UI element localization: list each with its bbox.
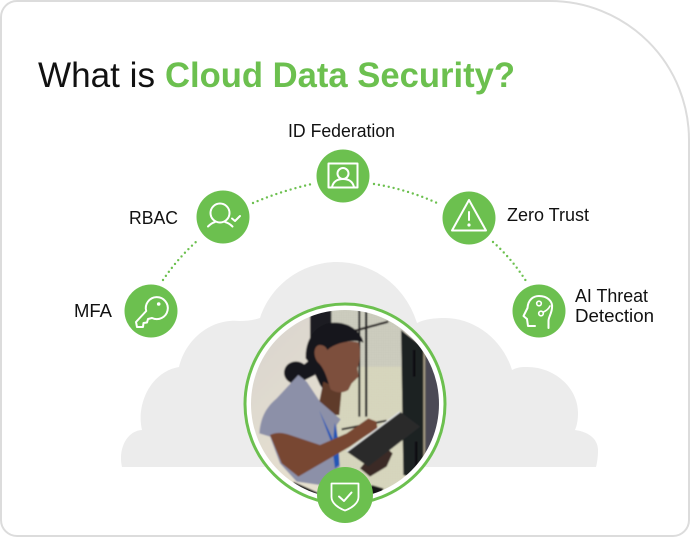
label: MFA: MFA (74, 301, 112, 321)
node: Zero Trust (442, 192, 589, 244)
dotted connector: RBAC to ID Federation (253, 184, 312, 203)
label: RBAC: RBAC (129, 208, 178, 228)
label: ID Federation: ID Federation (288, 121, 395, 141)
node: MFA (74, 284, 178, 338)
icon: warning triangle (442, 192, 496, 244)
dotted connector: Zero Trust to AI Threat Detection (493, 242, 526, 281)
node: ID Federation (288, 121, 395, 202)
label: Zero Trust: Zero Trust (507, 205, 589, 225)
dotted connector: MFA to RBAC (163, 241, 197, 280)
label: AI Threat Detection: AI Threat (575, 286, 648, 306)
label: AI Threat Detection: Detection (575, 306, 654, 326)
icon: ID portrait (316, 150, 370, 202)
label: AI Threat Detection (575, 286, 654, 326)
photo: technician with tablet in circular frame (244, 302, 446, 502)
title: What is (38, 56, 155, 95)
dotted connector: ID Federation to Zero Trust (374, 184, 437, 203)
icon: user with check (196, 190, 250, 244)
node: AI Threat Detection (512, 284, 654, 338)
icon: shield badge (317, 467, 373, 523)
title: Cloud Data Security? (165, 56, 515, 95)
icon: AI head (512, 284, 566, 338)
cloud background (121, 262, 598, 467)
icon: key (124, 284, 178, 338)
node: RBAC (129, 190, 250, 244)
